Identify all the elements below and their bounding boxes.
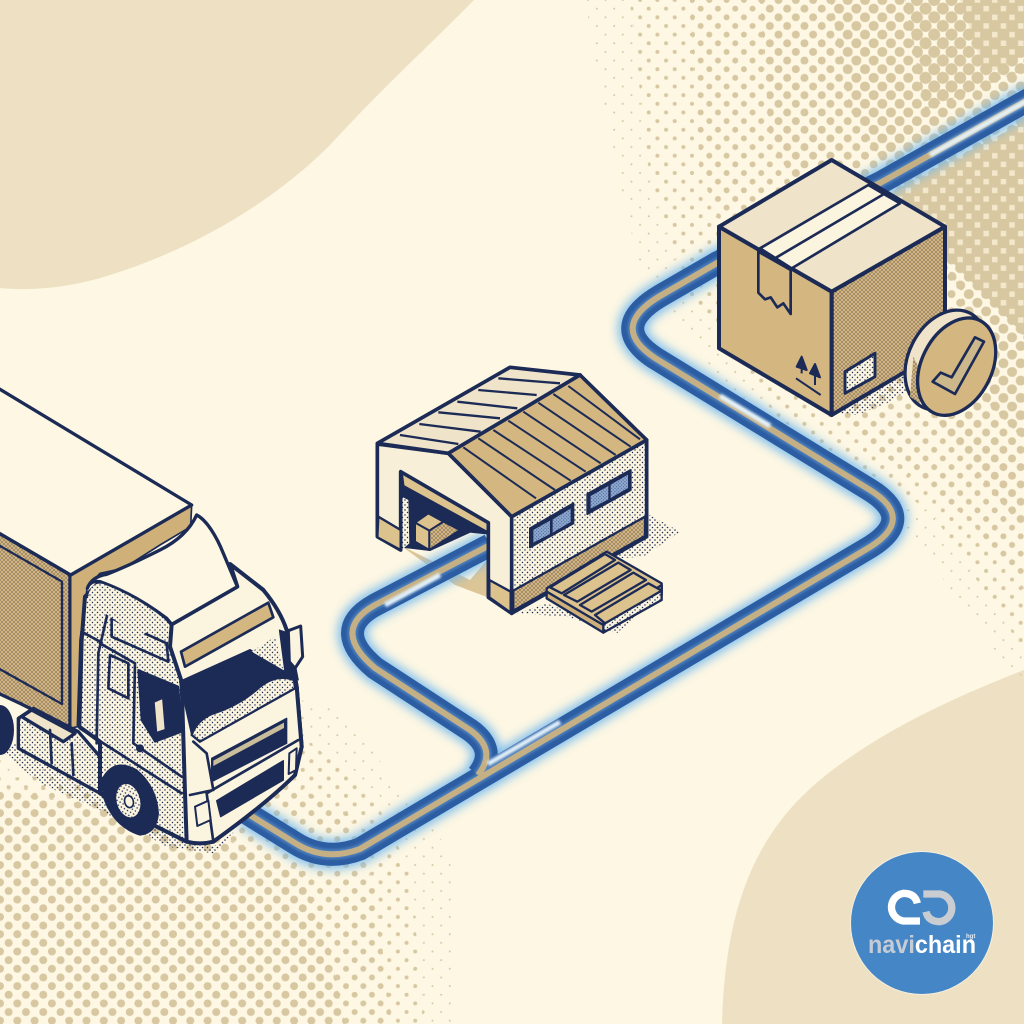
box shadow: [837, 372, 913, 415]
route line: [245, 96, 1024, 854]
warehouse shadow: [517, 513, 680, 633]
sun visor strip: [181, 603, 273, 667]
side wall base: [513, 517, 645, 611]
windshield: [180, 650, 295, 733]
cab front: [170, 564, 302, 843]
lower grille: [217, 761, 283, 817]
side wall: [512, 440, 647, 613]
side window: [138, 670, 182, 742]
shipping label: [845, 353, 875, 393]
logo badge: [850, 851, 994, 995]
warehouse: [377, 367, 680, 633]
side mirror: [153, 697, 166, 733]
box left face: [719, 227, 832, 415]
truck ground shadow: [0, 743, 237, 853]
this-way-up arrows: [796, 357, 821, 395]
box top: [719, 160, 945, 292]
trailer roof: [0, 388, 192, 575]
pallet: [547, 552, 662, 633]
halftone: top right: [585, 0, 1024, 690]
windshield pillar: [252, 637, 283, 670]
a-pillar: [279, 630, 298, 680]
tape on top: [760, 185, 900, 268]
front wheel: [102, 765, 158, 835]
door details: [80, 610, 182, 793]
headlights: [195, 748, 297, 826]
trailer side: [0, 533, 70, 728]
side skirt: [18, 708, 100, 793]
gable front: [377, 444, 512, 613]
gable base left: [377, 517, 401, 550]
roof fairing: [87, 515, 237, 624]
tape flap: [758, 252, 791, 314]
bottom-right beige blob: [722, 670, 1024, 1024]
gable base right: [489, 580, 511, 613]
bumper lines: [190, 740, 298, 842]
check badge: [889, 296, 1011, 429]
truck: [0, 388, 303, 853]
fairing stipple: [88, 584, 165, 637]
logo small mark: hgt: [966, 934, 975, 940]
trailer front: [71, 505, 192, 728]
logo wordmark: navichain: [868, 931, 976, 959]
small crate: [415, 513, 460, 550]
rear wheel: [0, 705, 14, 755]
exterior mirror: [288, 626, 303, 668]
window right: [587, 470, 631, 514]
door stipple jamb: [402, 497, 409, 550]
halftone: bottom left: [0, 700, 455, 1024]
top-left beige blob: [0, 0, 474, 289]
roof light side: [377, 367, 580, 453]
warehouse floor shadow: [400, 545, 487, 597]
logo circle: [851, 852, 993, 994]
cardboard box: [719, 160, 1011, 429]
logo icon: [891, 893, 952, 922]
cab side: [79, 567, 302, 842]
window left: [530, 503, 573, 547]
door shutter: [402, 473, 488, 533]
dash stipple band: [192, 678, 295, 742]
box right face: [832, 227, 945, 415]
upper grille: [212, 718, 287, 782]
door interior: [402, 475, 487, 550]
roof tan side: [448, 375, 647, 517]
